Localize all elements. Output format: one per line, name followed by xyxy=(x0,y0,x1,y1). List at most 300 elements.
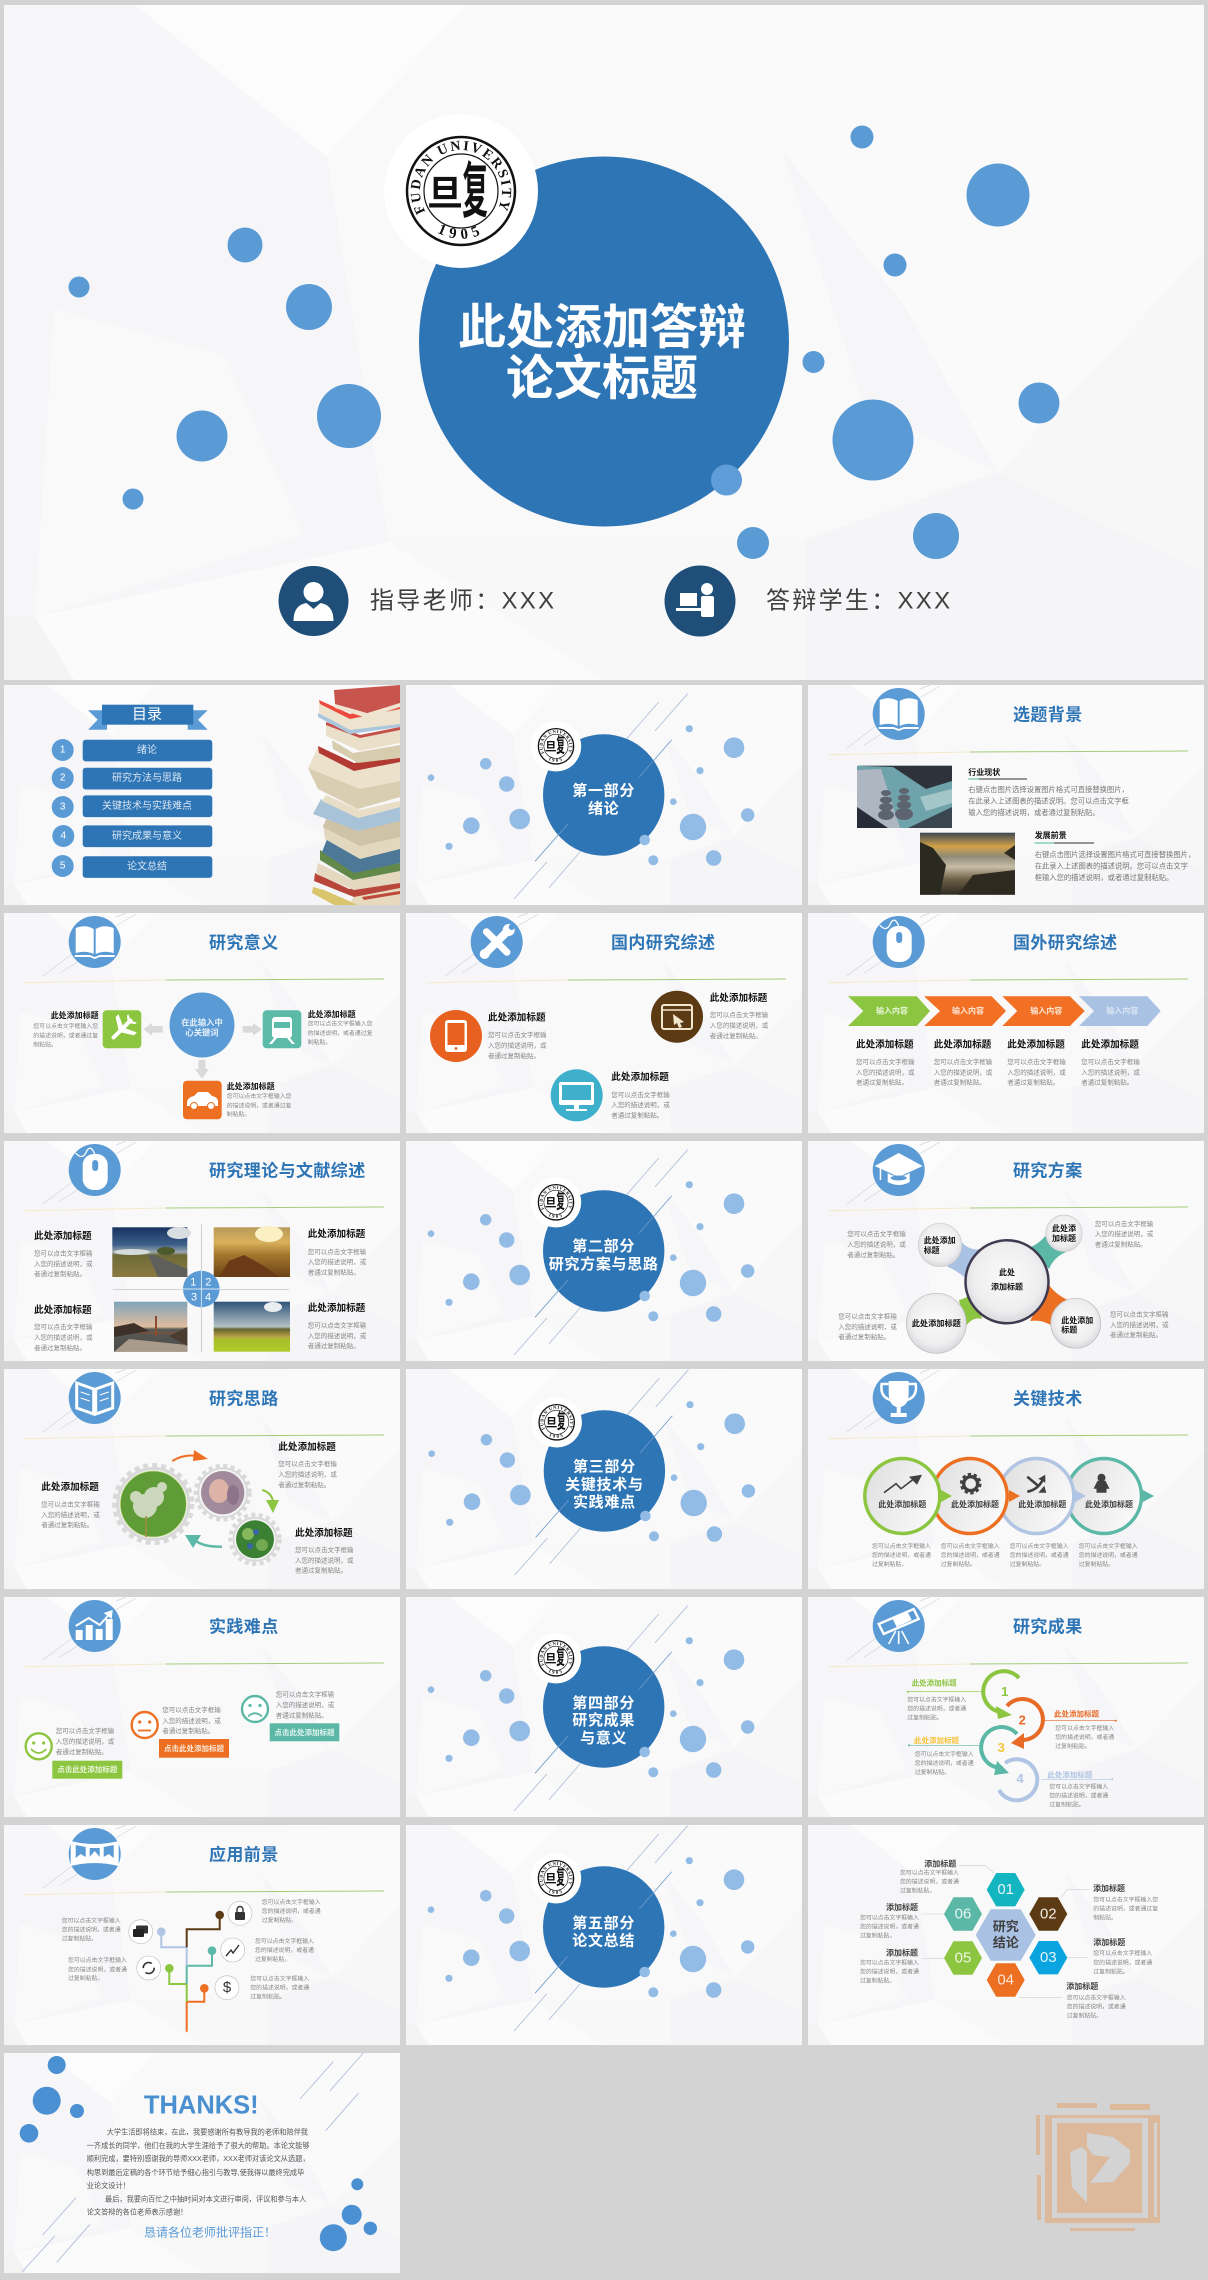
text: smile: 入您的描述说明，或 xyxy=(56,1736,115,1746)
icon: trend line xyxy=(884,1475,922,1493)
text: block 3: 者通过复制粘贴。 xyxy=(611,1110,663,1119)
text: top-left: 者通过复制粘贴。 xyxy=(847,1250,899,1259)
quadrant badge: 1 xyxy=(190,1276,196,1288)
text column 4: 者通过复制粘贴。 xyxy=(1081,1078,1133,1086)
text: block 1 xyxy=(488,1012,547,1060)
overlapping dot xyxy=(711,464,742,496)
text: top-right: 此处添加标题 xyxy=(278,1441,336,1453)
arrow: orange xyxy=(172,1450,208,1461)
text: left: 入您的描述说明，或 xyxy=(41,1510,100,1519)
label: orange xyxy=(159,1739,229,1758)
chevron 3: 输入内容 xyxy=(1030,1006,1062,1016)
section title xyxy=(549,1237,659,1273)
panel: 研究理论与文献综述 xyxy=(4,1141,400,1361)
callout 1: 此处添加标题 xyxy=(912,1678,957,1688)
text: neutral xyxy=(162,1705,221,1735)
step 3: blue ring: 此处添加标题 xyxy=(1018,1499,1066,1509)
text column 4: 此处添加标题 xyxy=(1081,1038,1139,1050)
node: bottom-left: 此处添加标题 xyxy=(912,1318,961,1328)
text column 2 xyxy=(941,1542,1000,1568)
text column 3 xyxy=(1007,1038,1066,1086)
text: bottom-right: 此处添加标题 xyxy=(308,1302,366,1314)
logo xyxy=(538,1404,582,1448)
center keyword: 心关键词 xyxy=(185,1027,219,1037)
text: bottom: 制粘贴。 xyxy=(227,1110,250,1118)
text: 发展前景: 在此录入上述图表的描述说明。您可以点击文字 xyxy=(1035,862,1188,870)
text: 发展前景: 框输入您的描述说明，或者通过复制粘贴。 xyxy=(1035,873,1173,882)
header xyxy=(828,1141,1188,1211)
text column 2: 此处添加标题 xyxy=(934,1038,992,1050)
text column 4 xyxy=(1081,1038,1140,1086)
label: teal xyxy=(270,1723,339,1741)
icon: neutral xyxy=(132,1712,158,1738)
chevron 3 xyxy=(1002,996,1085,1026)
text: 发展前景 xyxy=(1035,830,1195,882)
text: 行业现状: 在此录入上述图表的描述说明。您可以点击文字框 xyxy=(968,796,1130,806)
node: top-left xyxy=(918,1223,962,1267)
text: sync: 您可以点击文字框输入 xyxy=(68,1956,127,1964)
acknowledgement paragraph: 论文答辩的各位老师表示感谢！ xyxy=(87,2208,187,2216)
text: dollar: 您可以点击文字框输入 xyxy=(250,1974,309,1982)
center keyword: 在此输入中 xyxy=(181,1018,223,1028)
text: chat: 您可以点击文字框输入 xyxy=(62,1917,121,1925)
title: 关键技术 xyxy=(1013,1390,1083,1408)
text: 04: 过复制粘贴。 xyxy=(1067,2011,1102,2019)
item 2 xyxy=(52,767,212,790)
text column 1: 您可以点击文字框输入 xyxy=(872,1542,931,1550)
step 3 arc: 3 xyxy=(998,1740,1005,1755)
text: bottom-left: 者通过复制粘贴。 xyxy=(34,1343,86,1352)
text column 4: 入您的描述说明，或 xyxy=(1081,1068,1140,1076)
callout 4: 您可以点击文字框输入 xyxy=(1049,1783,1108,1791)
text column 4: 您的描述说明，或者通 xyxy=(1079,1551,1138,1559)
section title: 第二部分 xyxy=(572,1237,635,1255)
panel: 关键技术 xyxy=(808,1369,1204,1589)
callout 4: 您的描述说明，或者通 xyxy=(1049,1792,1108,1800)
section title: 研究成果 xyxy=(572,1711,635,1729)
section title: 第三部分 xyxy=(573,1458,636,1476)
panel: section 1 xyxy=(406,685,802,905)
center hexagon xyxy=(976,1909,1036,1961)
section title: 第五部分 xyxy=(572,1914,635,1932)
hexagon 02 xyxy=(1029,1897,1067,1931)
step 2 arc xyxy=(1007,1699,1043,1749)
item 4: 研究成果与意义 xyxy=(112,829,182,842)
text: block 2: 您可以点击文字框输 xyxy=(710,1010,769,1019)
callout 3: 您可以点击文字框输入 xyxy=(915,1750,974,1758)
text: 03: 过复制粘贴。 xyxy=(1093,1967,1129,1975)
text: left: 者通过复制粘贴。 xyxy=(41,1520,93,1529)
section title: 绪论 xyxy=(588,800,619,818)
item 3: 3 xyxy=(60,802,66,812)
text: block 1: 您可以点击文字框输 xyxy=(488,1030,547,1039)
icon: book with lines xyxy=(77,1383,113,1414)
text: bottom-left xyxy=(34,1304,93,1352)
text: bottom-right: 入您的描述说明，或 xyxy=(308,1331,367,1340)
label: orange: 点击此处添加标题 xyxy=(164,1743,224,1753)
text: lock: 您可以点击文字框输入 xyxy=(262,1898,321,1906)
chevron 4: 输入内容 xyxy=(1106,1006,1138,1016)
text: 04: 您的描述说明，或者通 xyxy=(1067,2002,1126,2010)
photo: bridge xyxy=(114,1302,187,1352)
step 2: orange ring xyxy=(932,1458,1020,1534)
acknowledgement paragraph: 大学生活即将结束，在此，我要感谢所有教导我的老师和陪伴我 xyxy=(107,2128,308,2136)
step 3: blue ring xyxy=(999,1458,1086,1534)
section title xyxy=(572,1694,635,1747)
text: top-left xyxy=(34,1230,93,1278)
text: bottom-left: 您可以点击文字框输 xyxy=(34,1322,93,1331)
leader lines xyxy=(922,1866,1089,1997)
text column 1: 您的描述说明，或者通 xyxy=(872,1551,931,1559)
text: block 2: 者通过复制粘贴。 xyxy=(710,1031,762,1040)
acknowledgement paragraph: 最后，我要向百忙之中抽时间对本文进行审阅，评议和参与本人 xyxy=(105,2194,306,2204)
logo: FUDAN UNIVERSITY xyxy=(540,1862,572,1886)
hexagon 02: 02 xyxy=(1040,1906,1057,1922)
text: block 2 xyxy=(710,992,769,1040)
photo: river stones xyxy=(857,766,952,828)
text: top-right: 您可以点击文字框输 xyxy=(1095,1219,1154,1228)
text column 1: 此处添加标题 xyxy=(856,1038,914,1050)
logo xyxy=(538,728,582,772)
icon: gear xyxy=(961,1474,980,1493)
text column 4: 过复制粘贴。 xyxy=(1079,1560,1114,1568)
icon: open book xyxy=(879,698,919,731)
title: 研究意义 xyxy=(209,932,279,952)
icon: dollar: $ xyxy=(223,1979,232,1996)
text: 05: 您的描述说明，或者通 xyxy=(860,1967,919,1975)
text column 3: 入您的描述说明，或 xyxy=(1007,1068,1066,1076)
header xyxy=(24,1825,384,1895)
logo: 旦 xyxy=(545,1872,557,1885)
text: right: 您可以点击文字框输入您 xyxy=(308,1020,373,1028)
section title: 关键技术与 xyxy=(565,1476,644,1494)
title: 应用前景 xyxy=(209,1844,279,1864)
text: 01: 过复制粘贴。 xyxy=(900,1887,935,1895)
heading: THANKS! xyxy=(144,2092,259,2120)
text: top-right xyxy=(1095,1219,1154,1248)
connector links xyxy=(947,1233,1070,1327)
section title: 实践难点 xyxy=(573,1493,636,1511)
text: top-left: 入您的描述说明，或 xyxy=(847,1240,906,1248)
text: bottom-right xyxy=(1110,1310,1169,1339)
picture: stack of books xyxy=(308,685,400,905)
callout 3: 过复制粘贴。 xyxy=(915,1768,950,1776)
text: top-right: 您可以点击文字框输 xyxy=(278,1459,337,1468)
decorative streaks xyxy=(22,2053,363,2272)
title: 国外研究综述 xyxy=(1013,932,1117,952)
text: top-right: 者通过复制粘贴。 xyxy=(308,1267,360,1276)
hexagon 04: 04 xyxy=(997,1972,1014,1988)
text: bottom-right: 入您的描述说明，或 xyxy=(295,1556,354,1565)
text: 01: 您可以点击文字框输入 xyxy=(900,1869,959,1877)
text: 行业现状 xyxy=(968,767,1130,817)
title: 研究方案 xyxy=(1013,1160,1083,1180)
arrow: green xyxy=(262,1490,279,1513)
text column 2: 您可以点击文字框输 xyxy=(934,1057,993,1066)
text: 04: 添加标题 xyxy=(1066,1981,1098,1991)
text: 04 xyxy=(1066,1981,1126,2019)
text: block 2: 入您的描述说明，或 xyxy=(710,1021,769,1030)
center node xyxy=(966,1240,1048,1323)
icon: sad xyxy=(242,1696,268,1722)
panel: 研究成果 xyxy=(808,1597,1204,1817)
node: top-right: 加标题 xyxy=(1052,1233,1076,1243)
text: top-left xyxy=(847,1229,906,1259)
logo xyxy=(538,1184,582,1228)
hexagon 03: 03 xyxy=(1040,1949,1057,1966)
node: bottom-right xyxy=(1051,1298,1101,1348)
quadrant badge: 4 xyxy=(205,1292,211,1304)
acknowledgement paragraph xyxy=(87,2128,310,2216)
step 3 arc xyxy=(981,1727,1017,1775)
text: lock xyxy=(262,1898,321,1924)
callout 1: 过复制粘贴。 xyxy=(907,1714,943,1722)
text: 03 xyxy=(1093,1937,1152,1975)
step 2: orange ring: 此处添加标题 xyxy=(951,1499,999,1509)
text column 1: 您可以点击文字框输 xyxy=(856,1057,915,1066)
text: 02: 制粘贴。 xyxy=(1093,1913,1117,1921)
main title xyxy=(458,302,746,406)
node: top-left: 此处添加 xyxy=(924,1235,956,1245)
text: bottom-right: 者通过复制粘贴。 xyxy=(308,1341,360,1350)
item 4 xyxy=(52,825,212,847)
icon: browser xyxy=(651,991,703,1043)
logo: Fudan University xyxy=(406,136,538,268)
text column 4 xyxy=(1079,1542,1138,1568)
callout 1: 您可以点击文字框输入 xyxy=(907,1695,966,1703)
logo: FUDAN UNIVERSITY xyxy=(540,1406,574,1430)
text: 行业现状: 输入您的描述说明，或者通过复制粘贴。 xyxy=(968,808,1100,817)
text: 02: 您可以点击文字框输入您 xyxy=(1093,1895,1158,1903)
text: block 3: 您可以点击文字框输 xyxy=(611,1090,670,1099)
text: bottom xyxy=(227,1081,292,1118)
photo: golden sunset xyxy=(214,1226,290,1277)
item 1 xyxy=(52,739,212,761)
icon: tools xyxy=(480,924,515,959)
section title xyxy=(572,782,635,818)
text: bottom-right: 您可以点击文字框输 xyxy=(1110,1310,1169,1318)
text: lock: 您的描述说明，或者通 xyxy=(262,1907,321,1915)
text: sync: 过复制粘贴。 xyxy=(68,1974,103,1982)
text: left: 的描述说明，或者通过复 xyxy=(33,1031,98,1039)
logo: 1905 xyxy=(548,1213,562,1218)
header xyxy=(24,1141,384,1211)
step 1: green ring: 此处添加标题 xyxy=(878,1499,926,1509)
quadrant badge xyxy=(113,1224,289,1352)
text: bottom-left xyxy=(838,1312,897,1341)
text: 05: 添加标题 xyxy=(886,1948,918,1958)
text: dollar xyxy=(250,1974,309,2000)
text column 4: 您可以点击文字框输入 xyxy=(1079,1542,1138,1550)
text column 2 xyxy=(934,1038,993,1086)
panel: 实践难点 xyxy=(4,1597,400,1817)
panel: 研究方案 xyxy=(808,1141,1204,1361)
text: right: 此处添加标题 xyxy=(308,1009,356,1019)
text: 发展前景: 右键点击图片选择设置图片格式可直接替换图片， xyxy=(1035,850,1195,859)
logo: 1905 xyxy=(549,1433,563,1438)
node: bottom-left xyxy=(906,1293,966,1353)
text: 06: 添加标题 xyxy=(886,1902,918,1912)
header xyxy=(828,913,1188,983)
text: top-right xyxy=(278,1441,337,1489)
callout 3: 您的描述说明，或者通 xyxy=(915,1759,974,1767)
text: dollar: 您的描述说明，或者通 xyxy=(250,1983,309,1991)
hexagon 01 xyxy=(987,1873,1025,1906)
label: green: 点击此处添加标题 xyxy=(57,1764,118,1774)
step 4 arc: 4 xyxy=(1016,1771,1024,1786)
icon: graduation cap xyxy=(875,1153,923,1185)
item 5 xyxy=(52,855,212,878)
panel: section 4 xyxy=(406,1597,802,1817)
step 4: teal ring xyxy=(1066,1458,1154,1534)
text: sync xyxy=(68,1956,127,1982)
text: top-right: 者通过复制粘贴。 xyxy=(278,1480,330,1489)
icon: mouse xyxy=(76,1148,108,1190)
logo: 复 xyxy=(556,1867,565,1889)
text column 1: 入您的描述说明，或 xyxy=(856,1068,915,1076)
callout 2: 此处添加标题 xyxy=(1054,1708,1099,1718)
text: 06: 您的描述说明，或者通 xyxy=(860,1923,919,1931)
section title: 第一部分 xyxy=(572,782,635,800)
text column 2: 您可以点击文字框输入 xyxy=(941,1542,1000,1550)
text: lock: 过复制粘贴。 xyxy=(262,1916,297,1924)
text: 05: 您可以点击文字框输入 xyxy=(860,1958,919,1966)
text: left: 此处添加标题 xyxy=(51,1010,99,1020)
text: left: 您可以点击文字框输 xyxy=(41,1500,100,1509)
callout 1: 您的描述说明，或者通 xyxy=(907,1705,966,1713)
text: 03: 添加标题 xyxy=(1093,1937,1125,1947)
text: smile: 您可以点击文字框输 xyxy=(56,1726,115,1735)
node: top-right: 此处添 xyxy=(1052,1223,1076,1233)
hexagon 01: 01 xyxy=(997,1881,1014,1898)
text: neutral: 您可以点击文字框输 xyxy=(162,1705,221,1714)
text: left xyxy=(33,1010,99,1048)
text: bottom-right xyxy=(295,1527,354,1574)
icon: smile xyxy=(26,1733,52,1759)
quadrant badge: 2 xyxy=(205,1276,211,1288)
text: smile: 者通过复制粘贴。 xyxy=(56,1747,108,1756)
icon: crossing arrows xyxy=(1027,1475,1046,1493)
icon: open book xyxy=(75,926,115,959)
callout 3: 此处添加标题 xyxy=(914,1735,959,1745)
panel: section 2 xyxy=(406,1141,802,1361)
panel: contents slide xyxy=(4,685,400,905)
center hexagon: 研究 xyxy=(993,1919,1019,1934)
panel: section 5 xyxy=(406,1825,802,2045)
icon: monitor xyxy=(551,1069,603,1121)
chevron 2 xyxy=(924,996,1006,1026)
text: 06: 您可以点击文字框输入 xyxy=(860,1914,919,1922)
text: 行业现状: 右键点击图片选择设置图片格式可直接替换图片， xyxy=(968,785,1129,794)
text: block 3: 此处添加标题 xyxy=(611,1071,669,1083)
photo: road xyxy=(112,1227,191,1277)
text column 3: 您可以点击文字框输 xyxy=(1007,1057,1066,1066)
logo: FUDAN UNIVERSITY xyxy=(540,1642,572,1666)
hexagon 05: 05 xyxy=(955,1950,971,1966)
icon: rising bars xyxy=(76,1610,113,1640)
center node: 此处 xyxy=(999,1267,1015,1277)
watermark stamp xyxy=(1036,2103,1160,2231)
gear photo: portrait xyxy=(196,1466,250,1520)
logo: 复 xyxy=(557,1411,565,1433)
text: top-right: 您可以点击文字框输 xyxy=(308,1247,367,1256)
text: top-right xyxy=(308,1228,367,1276)
text: trend: 您的描述说明，或者通 xyxy=(255,1946,314,1954)
icon: lock xyxy=(228,1901,252,1925)
item 1: 绪论 xyxy=(137,743,157,756)
header xyxy=(24,913,384,983)
icon: teacher xyxy=(278,566,348,636)
text: 05 xyxy=(860,1948,919,1984)
chevron 4 xyxy=(1079,996,1161,1026)
text: block 1: 者通过复制粘贴。 xyxy=(488,1051,540,1060)
label: green xyxy=(52,1761,122,1779)
arrow: teal xyxy=(185,1535,222,1548)
callout 4: 此处添加标题 xyxy=(1047,1770,1093,1780)
text: top-left: 您可以点击文字框输 xyxy=(847,1229,906,1238)
text: trend: 过复制粘贴。 xyxy=(255,1955,290,1963)
acknowledgement paragraph: 构思到最后定稿的各个环节给予细心指引与教导,使我得以最终完成毕 xyxy=(87,2168,304,2177)
logo: 旦 xyxy=(545,740,557,753)
section title xyxy=(565,1458,644,1511)
title: 研究理论与文献综述 xyxy=(209,1160,366,1180)
student label: 答辩学生：XXX xyxy=(766,588,952,614)
logo: 1905 xyxy=(548,757,562,762)
text: sync: 您的描述说明，或者通 xyxy=(68,1965,127,1973)
text: bottom-right: 您可以点击文字框输 xyxy=(295,1545,354,1554)
text: top-right: 者通过复制粘贴。 xyxy=(1095,1240,1147,1248)
title: 国内研究综述 xyxy=(611,932,715,952)
step 1 arc: 1 xyxy=(1001,1684,1008,1699)
ribbon heading xyxy=(88,705,208,730)
photo: field xyxy=(214,1302,290,1352)
center hexagon: 结论 xyxy=(993,1935,1019,1950)
title: 实践难点 xyxy=(209,1616,279,1636)
text: left: 制粘贴。 xyxy=(33,1040,57,1048)
text: bottom-left: 者通过复制粘贴。 xyxy=(838,1332,890,1341)
text: 01: 您的描述说明，或者通 xyxy=(900,1878,959,1886)
callout 2 xyxy=(1044,1708,1117,1750)
hexagon 05 xyxy=(944,1941,982,1975)
callout 4 xyxy=(1041,1770,1113,1809)
item 2: 2 xyxy=(60,772,66,784)
text: bottom-right: 入您的描述说明，或 xyxy=(1110,1320,1169,1329)
text: chat: 您的描述说明，或者通 xyxy=(62,1926,121,1934)
branching tree xyxy=(157,1911,224,2032)
header xyxy=(24,1597,384,1667)
text: left: 您可以点击文字框输入您 xyxy=(33,1022,98,1030)
text: bottom-right: 您可以点击文字框输 xyxy=(308,1320,367,1329)
gear photo: dandelion xyxy=(115,1466,192,1542)
text: neutral: 者通过复制粘贴。 xyxy=(162,1726,214,1735)
text: bottom-right: 此处添加标题 xyxy=(295,1527,353,1539)
section title: 论文总结 xyxy=(572,1932,635,1950)
header xyxy=(828,685,1188,755)
step 1: green ring xyxy=(865,1458,952,1534)
logo xyxy=(538,1860,582,1904)
text: bottom-left: 入您的描述说明，或 xyxy=(838,1322,897,1331)
icon: sync xyxy=(137,1956,161,1980)
chevron 1 xyxy=(848,996,930,1026)
icon: train xyxy=(263,1010,301,1048)
panel: 研究结论 hexagons xyxy=(808,1825,1204,2045)
panel: 选题背景 xyxy=(808,685,1204,905)
icon: trend xyxy=(221,1938,245,1962)
text: 05: 过复制粘贴。 xyxy=(860,1976,895,1984)
icon: person xyxy=(1094,1474,1110,1493)
item 1: 1 xyxy=(60,744,66,756)
node: top-left: 标题 xyxy=(924,1245,940,1255)
